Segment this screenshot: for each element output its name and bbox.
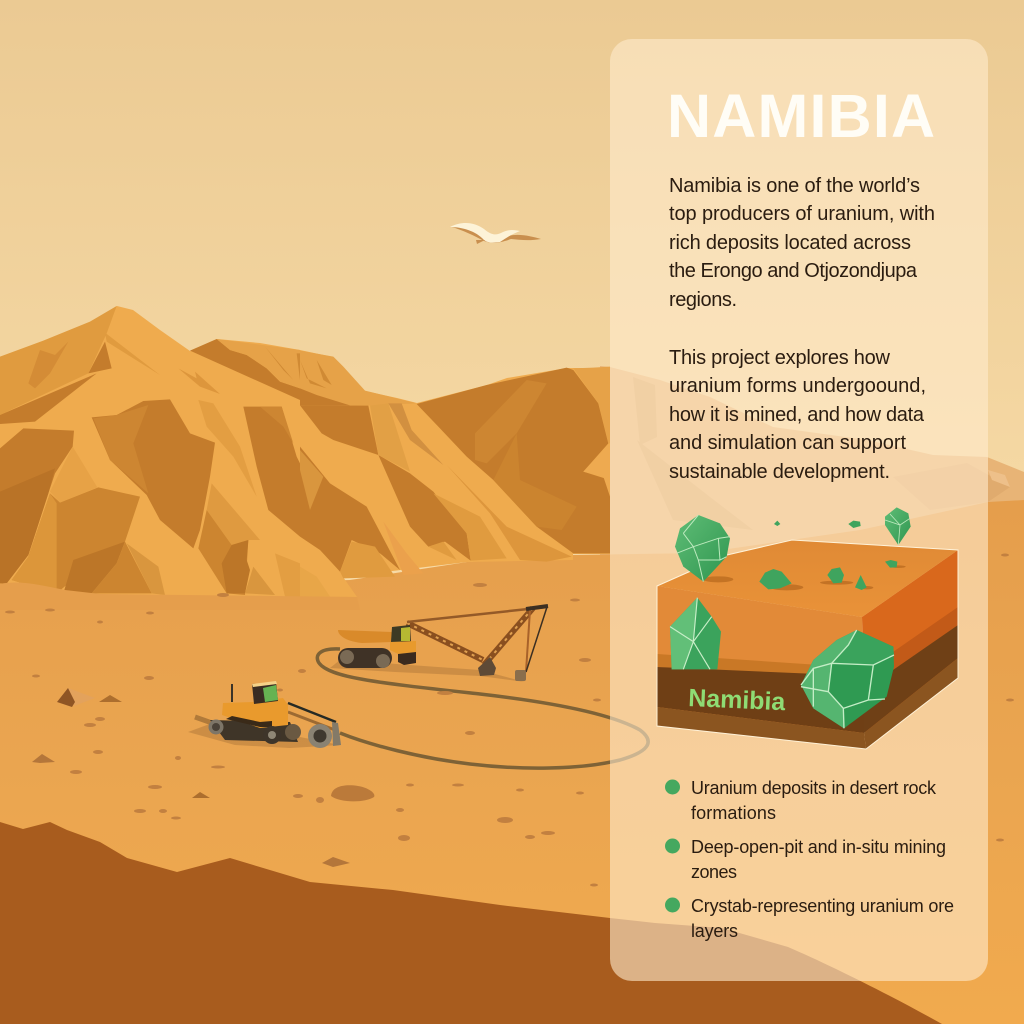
crystal: top right <box>885 507 911 545</box>
crane tracks <box>338 648 392 668</box>
project paragraph: how it is mined, and how data <box>669 404 925 426</box>
block label: Namibia <box>688 684 787 716</box>
small crystals <box>759 521 897 590</box>
bullet 1: Uranium deposits in desert rock <box>691 778 937 798</box>
mountains <box>0 306 610 597</box>
tractor shadow <box>188 722 340 748</box>
intro paragraph: Namibia is one of the world’s <box>669 175 920 197</box>
excavator crane vehicle <box>330 606 548 682</box>
intro paragraph: regions. <box>669 289 737 311</box>
foothill sand strip <box>0 583 360 610</box>
bullet list <box>665 778 954 941</box>
tractor wheels <box>208 720 224 734</box>
gem shadows <box>703 565 906 590</box>
dark foreground dune <box>0 822 942 1024</box>
sky background <box>0 0 1024 620</box>
distant hills <box>600 366 1024 570</box>
bullet 3: layers <box>691 921 738 941</box>
bullet 1 <box>665 778 937 823</box>
crane bucket <box>478 657 496 676</box>
intro paragraph: rich deposits located across <box>669 232 911 254</box>
intro paragraph: top producers of uranium, with <box>669 203 935 225</box>
block front face <box>657 586 864 749</box>
title: NAMIBIA <box>667 82 935 150</box>
desert ground <box>0 500 1024 1024</box>
tyre track <box>317 649 648 768</box>
crane bed <box>338 630 392 643</box>
bullet 2: Deep-open-pit and in-situ mining <box>691 837 946 857</box>
project paragraph <box>669 347 926 483</box>
tractor cab <box>252 682 278 704</box>
crystal: left front <box>670 598 721 669</box>
project paragraph: This project explores how <box>669 347 891 369</box>
crystal: large front <box>801 630 894 728</box>
bullet 1: formations <box>691 803 776 823</box>
project paragraph: and simulation can support <box>669 432 906 454</box>
crane boom lattice <box>407 606 548 672</box>
block right face <box>862 550 958 749</box>
geological block illustration <box>657 507 958 749</box>
bullet 3: Crystab-representing uranium ore <box>691 896 954 916</box>
tractor vehicle <box>188 681 341 748</box>
intro paragraph: the Erongo and Otjozondjupa <box>669 260 918 282</box>
crane shadow <box>330 660 525 682</box>
panel: info card <box>610 39 988 981</box>
crane cab <box>391 625 411 642</box>
bullet 3 <box>665 896 954 941</box>
intro paragraph <box>669 175 935 311</box>
bullet 2 <box>665 837 946 882</box>
crystal: top left <box>675 515 730 582</box>
tractor body <box>222 698 288 728</box>
scattered rocks <box>5 554 1014 886</box>
project paragraph: sustainable development. <box>669 461 890 483</box>
bird <box>450 223 541 244</box>
tractor chassis <box>210 720 298 742</box>
project paragraph: uranium forms undergoound, <box>669 375 926 397</box>
block top face <box>657 540 958 617</box>
bullet 2: zones <box>691 862 737 882</box>
